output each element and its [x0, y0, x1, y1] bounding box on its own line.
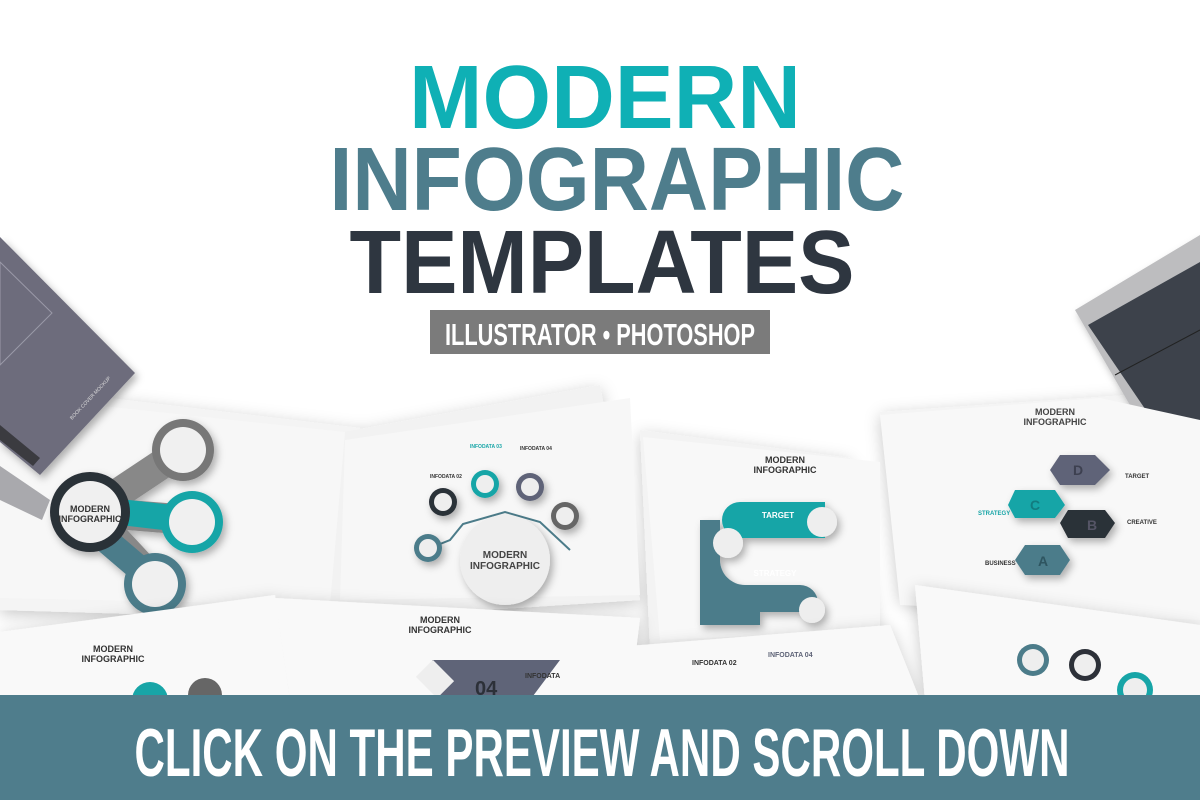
- paper: infographic 2 (arc): [340, 398, 640, 605]
- text: MODERN: [420, 615, 460, 625]
- book cover top left: BOOK COVER MOCKUP: [69, 375, 113, 421]
- paper: infographic 3 (S shape): MODERN: [765, 455, 805, 465]
- paper: infographic 1 (circles): [0, 395, 345, 615]
- text: INFODATA: [525, 673, 560, 680]
- paper: infographic 3 (S shape): INFOGRAPHIC: [754, 465, 817, 475]
- text: INFOGRAPHIC: [408, 625, 472, 635]
- ruler left: [0, 466, 50, 520]
- paper: infographic 3 (S shape): [643, 437, 880, 640]
- bottom banner: [0, 695, 1200, 800]
- paper: infographic 4 (arrows ABCD): MODERN: [1035, 407, 1075, 417]
- text: INFODATA 02: [692, 660, 737, 667]
- title: INFOGRAPHIC: INFOGRAPHIC: [330, 130, 904, 230]
- paper: infographic 2 (arc): INFODATA 04: [520, 446, 552, 452]
- paper: infographic 4 (arrows ABCD): C: [1030, 497, 1040, 513]
- circles cluster: [50, 419, 223, 615]
- paper: infographic 2 (arc): INFODATA 03: [470, 444, 502, 450]
- subtitle box: ILLUSTRATOR • PHOTOSHOP: [445, 317, 755, 352]
- paper: infographic 4 (arrows ABCD): BUSINESS: [985, 561, 1016, 567]
- paper: infographic 2 (arc): INFODATA 02: [430, 474, 462, 480]
- book cover top left: [0, 237, 135, 475]
- paper: infographic 3 (S shape): TARGET: [762, 511, 794, 520]
- paper: infographic 1 (circles): INFOGRAPHIC: [58, 514, 122, 524]
- text: MODERN: [93, 644, 133, 654]
- text: INFODATA 04: [768, 652, 813, 659]
- device top right: [1075, 235, 1200, 440]
- paper: infographic 2 (arc): INFOGRAPHIC: [470, 561, 540, 572]
- paper: back stack: [0, 385, 1200, 650]
- paper: infographic 4 (arrows ABCD): TARGET: [1125, 474, 1150, 480]
- paper: infographic 4 (arrows ABCD): INFOGRAPHIC: [1024, 417, 1087, 427]
- paper: infographic 4 (arrows ABCD): B: [1087, 517, 1097, 533]
- text: INFOGRAPHIC: [82, 654, 145, 664]
- paper: bottom row: [0, 585, 1200, 700]
- text: 04: [475, 678, 498, 700]
- paper: infographic 4 (arrows ABCD): D: [1073, 462, 1083, 478]
- paper: infographic 3 (S shape): STRATEGY: [754, 569, 797, 578]
- paper: infographic 1 (circles): MODERN: [70, 504, 110, 514]
- paper: infographic 4 (arrows ABCD): [880, 398, 1200, 620]
- title: MODERN: MODERN: [409, 48, 801, 148]
- paper: infographic 4 (arrows ABCD): A: [1038, 553, 1048, 569]
- paper: infographic 2 (arc): MODERN: [483, 550, 527, 561]
- paper: infographic 4 (arrows ABCD): CREATIVE: [1127, 520, 1157, 526]
- paper: infographic 4 (arrows ABCD): STRATEGY: [978, 511, 1010, 517]
- title: TEMPLATES: TEMPLATES: [350, 213, 854, 313]
- subtitle box: [430, 310, 770, 354]
